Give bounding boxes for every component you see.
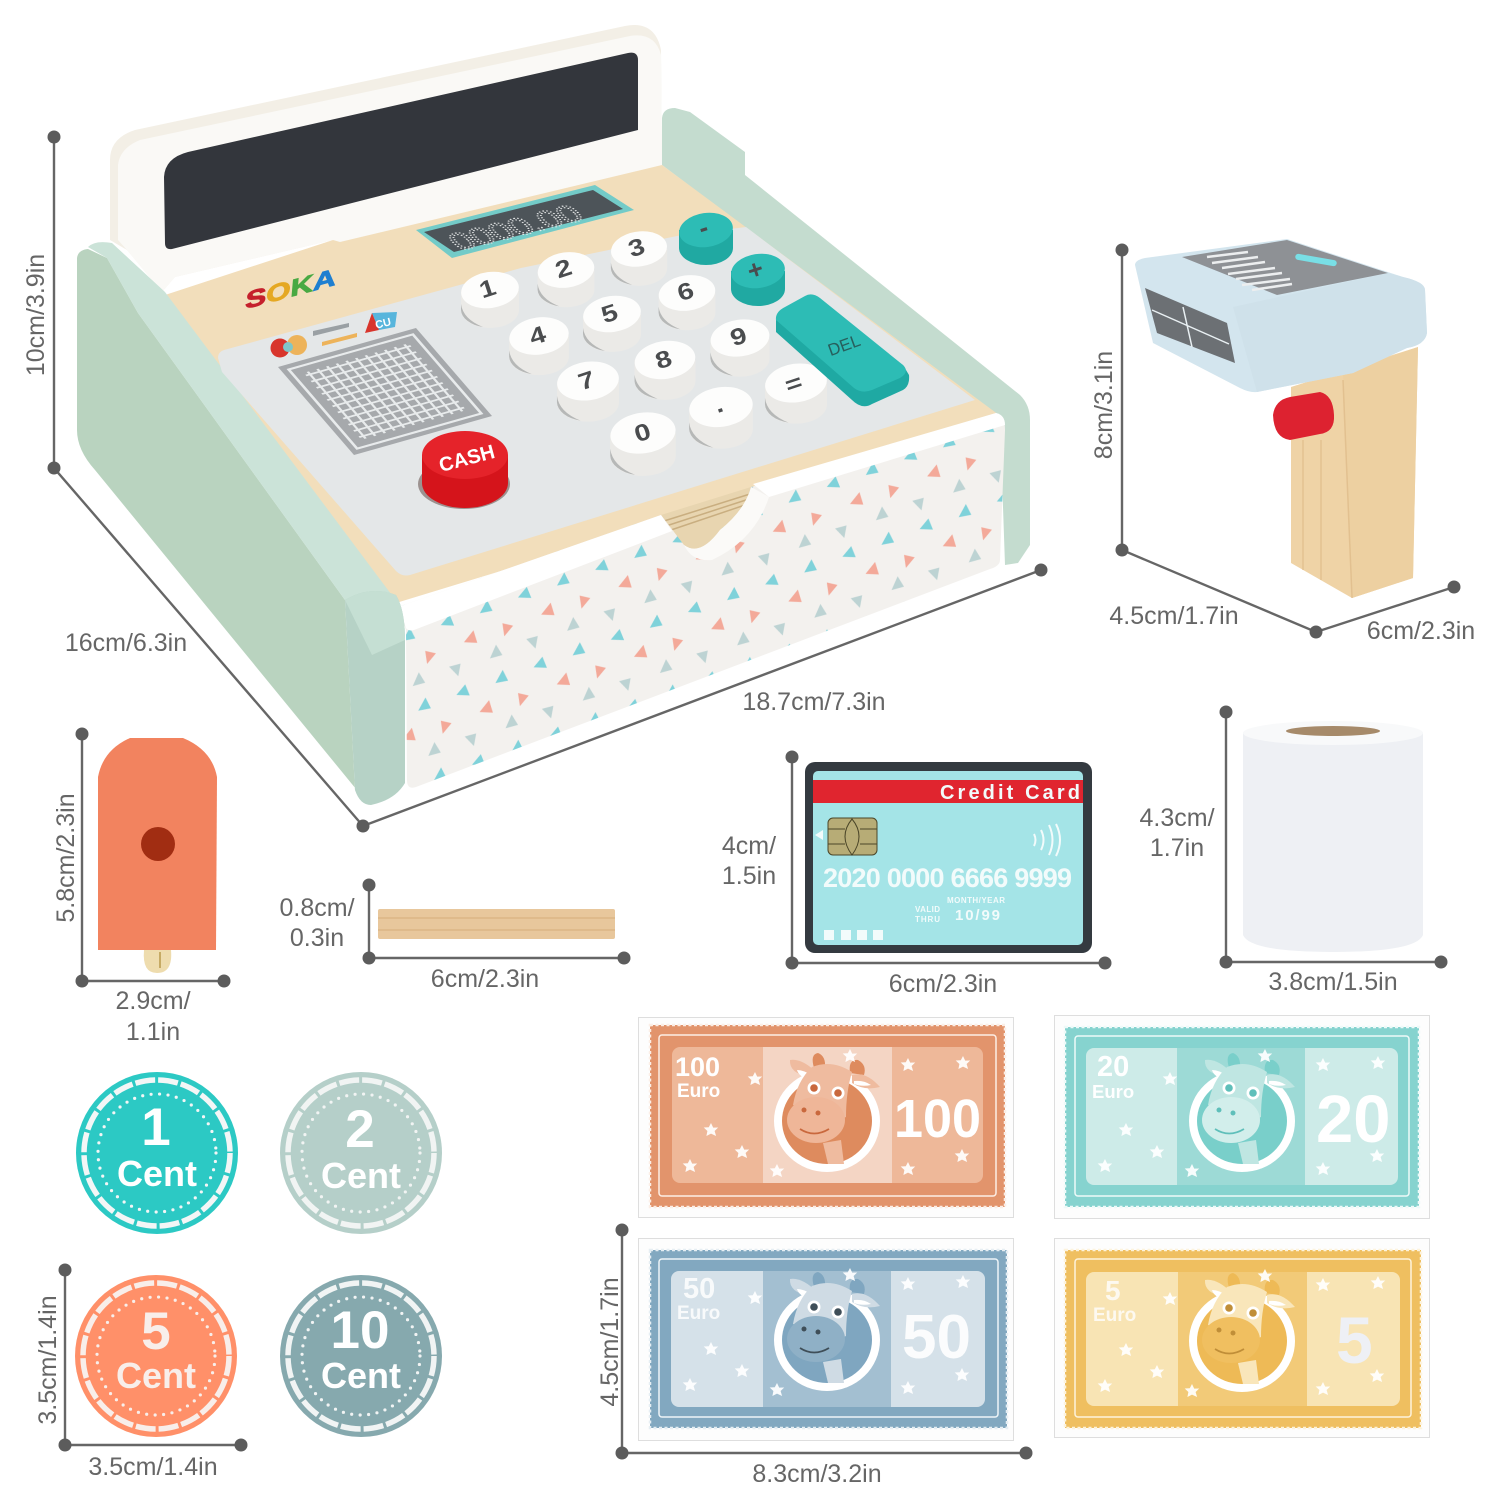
coin: 5 cent — [75, 1275, 237, 1437]
keys: 1 — [476, 273, 499, 304]
credit card — [805, 762, 1092, 953]
wooden top — [165, 165, 1003, 603]
LED price display — [416, 185, 634, 258]
dimension: orange peg: 5.8cm/2.3in — [52, 793, 80, 923]
receipt paper roll — [1243, 721, 1423, 952]
banknote: 5 euro: Euro — [1093, 1305, 1136, 1326]
keys: 6 — [674, 276, 697, 307]
drawer front — [398, 413, 1005, 788]
dimension: card: 4cm/ — [722, 832, 776, 860]
dimension: banknote: 4.5cm/1.7in — [596, 1277, 624, 1407]
credit card: 10/99 — [955, 907, 1000, 924]
credit card: 2020 0000 6666 9999 — [823, 863, 1072, 893]
banknote: 50 euro: Euro — [677, 1303, 720, 1324]
dimension: card — [722, 750, 1112, 998]
dimension: scanner: 6cm/2.3in — [1367, 617, 1475, 645]
dimension: card: 1.5in — [722, 862, 776, 890]
banknote: 5 euro — [1054, 1238, 1430, 1438]
coin: 5 cent: 5 — [141, 1302, 171, 1361]
dimension: banknote: 8.3cm/3.2in — [752, 1460, 882, 1488]
dimension: roll: 1.7in — [1150, 834, 1204, 862]
banknote: 50 euro: 50 — [683, 1273, 715, 1305]
keys: = — [781, 368, 806, 399]
credit card: VALID — [915, 905, 940, 914]
banknote: 20 euro: Euro — [1092, 1081, 1134, 1102]
coin: 1 cent — [76, 1072, 238, 1234]
dimension: orange peg: 1.1in — [126, 1018, 180, 1046]
dimension: stick — [279, 878, 630, 993]
dimension: card: 6cm/2.3in — [889, 970, 997, 998]
dimension: stick: 0.3in — [290, 924, 344, 952]
CASH button: CASH — [437, 441, 497, 477]
dimension: coin — [34, 1264, 248, 1481]
dimension: roll — [1139, 706, 1448, 996]
grey keypad panel — [218, 227, 975, 576]
dimension: roll: 3.8cm/1.5in — [1268, 968, 1398, 996]
keys: 4 — [526, 320, 550, 351]
keys: 9 — [727, 321, 750, 352]
dimension: coin: 3.5cm/1.4in — [34, 1295, 62, 1425]
dimension: banknote — [596, 1224, 1032, 1488]
left end cap — [345, 591, 405, 805]
dimension: scanner — [1090, 244, 1475, 645]
dimension: stick: 6cm/2.3in — [431, 965, 539, 993]
display board — [110, 25, 662, 292]
credit card: Credit Card — [940, 782, 1080, 804]
keys: 8 — [652, 344, 675, 375]
QR grid pad — [278, 328, 492, 455]
dimension: register height depth width: 18.7cm/7.3in — [742, 688, 886, 716]
coin: 2 cent: 2 — [345, 1100, 375, 1159]
dimension: scanner: 8cm/3.1in — [1090, 351, 1118, 459]
banknote: 50 euro — [638, 1238, 1014, 1440]
coin: 1 cent: Cent — [117, 1153, 197, 1194]
credit card: MONTH/YEAR — [947, 896, 1005, 905]
banknote: 20 euro: 20 — [1316, 1082, 1391, 1157]
dimension: roll: 4.3cm/ — [1139, 804, 1215, 832]
coin: 10 cent: 10 — [331, 1301, 389, 1360]
payment logos: CU — [374, 316, 392, 332]
keys — [459, 209, 829, 476]
banknote: 5 euro: 5 — [1105, 1275, 1121, 1306]
coin: 10 cent: Cent — [321, 1355, 401, 1396]
orange peg — [98, 738, 217, 973]
left side wall — [77, 242, 400, 800]
banknote: 100 euro: Euro — [677, 1081, 720, 1102]
wooden stick — [378, 909, 615, 939]
coin: 2 cent: Cent — [321, 1155, 401, 1196]
dimension: stick: 0.8cm/ — [279, 894, 355, 922]
banknote: 50 euro: 50 — [902, 1303, 971, 1372]
dimension: orange peg: 2.9cm/ — [115, 987, 191, 1015]
keys: 5 — [598, 298, 621, 329]
scanner — [1135, 239, 1427, 598]
LED price display: 0000.00 — [441, 200, 591, 256]
keys: 0 — [631, 417, 654, 448]
credit card: THRU — [915, 915, 940, 924]
banknote: 20 euro: 20 — [1097, 1051, 1129, 1083]
dimension: orange peg — [52, 728, 230, 1046]
panel: cash register — [77, 25, 1030, 805]
banknote: 100 euro — [638, 1018, 1014, 1218]
SOKA logo: SOKA — [244, 264, 337, 315]
dimension: register height depth width: 16cm/6.3in — [65, 629, 187, 657]
keys: 2 — [552, 253, 575, 284]
CASH button — [418, 431, 510, 509]
DEL key — [776, 294, 909, 406]
keys: 3 — [625, 232, 648, 263]
coin: 10 cent — [280, 1275, 442, 1437]
payment logos — [270, 312, 397, 358]
dimension: scanner: 4.5cm/1.7in — [1109, 602, 1239, 630]
keys: - — [694, 212, 712, 243]
keys: . — [711, 390, 726, 418]
banknote: 100 euro: 100 — [894, 1089, 981, 1149]
keys: + — [743, 253, 767, 286]
dimension: register height depth width — [22, 130, 1048, 832]
coin: 2 cent — [280, 1072, 442, 1234]
right side wall — [662, 108, 1030, 565]
coin: 5 cent: Cent — [116, 1355, 196, 1396]
DEL key: DEL — [825, 331, 863, 360]
dimension: coin: 3.5cm/1.4in — [88, 1453, 218, 1481]
dimension: register height depth width: 10cm/3.9in — [22, 254, 50, 376]
coin: 1 cent: 1 — [141, 1098, 171, 1157]
keys: 7 — [575, 365, 598, 396]
banknote: 100 euro: 100 — [675, 1052, 720, 1082]
banknote: 5 euro: 5 — [1336, 1303, 1373, 1377]
drawer wood inside notch — [661, 487, 751, 552]
banknote: 20 euro — [1054, 1016, 1430, 1218]
